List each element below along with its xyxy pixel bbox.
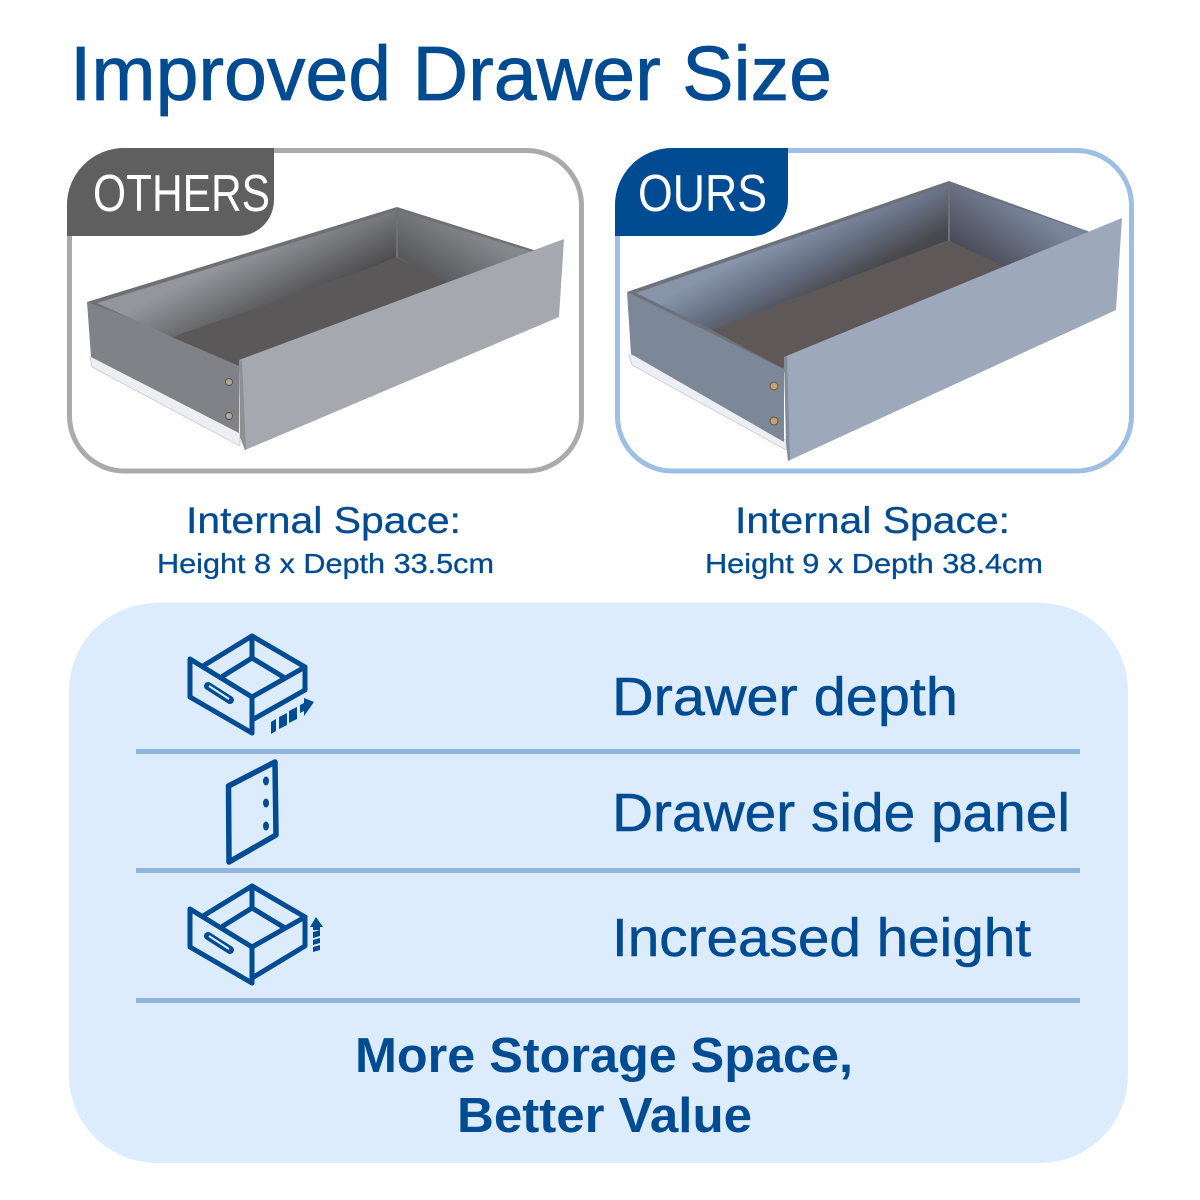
label: drawer depth: Drawer depth (612, 667, 958, 727)
label: side panel: Drawer side panel (612, 783, 1070, 843)
caption: ours internal space: Height 9 x Depth 38.4cm (705, 548, 1043, 579)
panel frame: ours (618, 150, 1132, 471)
panel background (69, 603, 1128, 1163)
icon: side panel (228, 762, 276, 862)
drawer photo: others (87, 207, 564, 450)
conclusion text (355, 1029, 853, 1143)
tag: others: OTHERS (93, 165, 270, 223)
caption: others internal space: Internal Space: (186, 500, 461, 541)
panel: others (67, 148, 582, 471)
caption: others internal space: Height 8 x Depth 33.5cm (157, 548, 494, 579)
conclusion text: More Storage Space, (355, 1029, 853, 1083)
title: Improved Drawer Size (70, 31, 832, 117)
conclusion text: Better Value (457, 1089, 752, 1143)
caption: others internal space (157, 500, 494, 579)
label: increased height: Increased height (612, 908, 1031, 968)
icon: increased height (190, 886, 323, 983)
tag: others (67, 148, 274, 236)
panel: benefits (69, 603, 1128, 1163)
tag: ours (615, 148, 788, 236)
panel: ours (615, 148, 1132, 471)
drawer photo: ours (627, 181, 1122, 461)
tag: ours: OURS (638, 165, 767, 223)
caption: ours internal space: Internal Space: (735, 500, 1010, 541)
caption: ours internal space (705, 500, 1043, 579)
icon: drawer depth (190, 636, 314, 734)
panel frame: others (70, 150, 582, 471)
